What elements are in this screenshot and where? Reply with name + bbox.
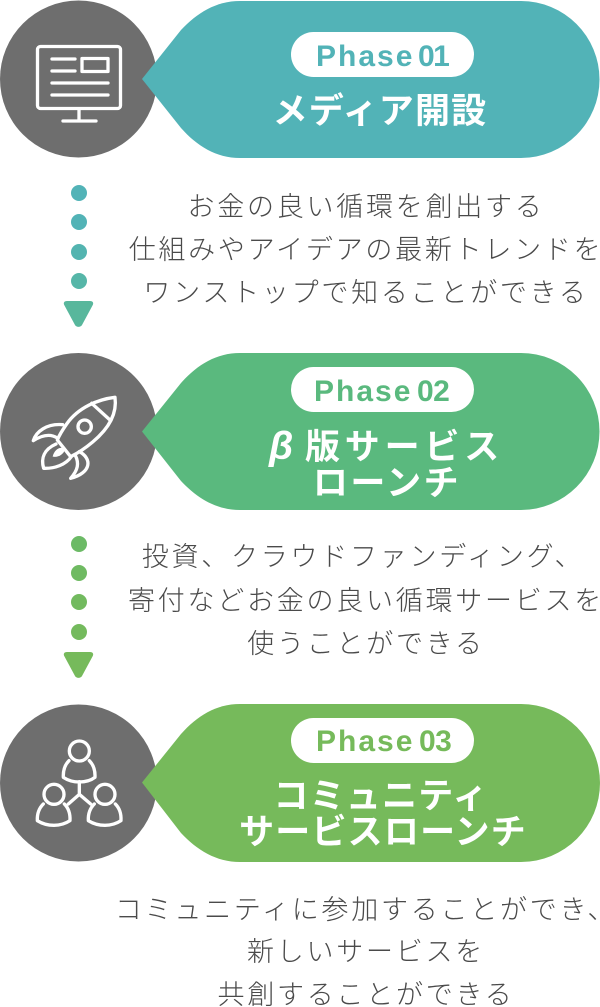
phase 02 pill label: Phase (314, 375, 412, 408)
phase 03 heading (239, 777, 527, 852)
phase 02 pill label: 02 (417, 375, 449, 408)
phase 01 pill label: 01 (418, 40, 449, 73)
text block: phase 02 description: 寄付などお金の良い循環サービスを (128, 586, 600, 616)
panel: phase 03 (142, 704, 600, 862)
text block: phase 03 description (115, 895, 600, 1007)
text block: phase 01 description (129, 192, 600, 308)
phase 03 pill label: Phase (316, 725, 414, 758)
panel: phase 02 (142, 353, 600, 510)
text block: phase 02 description (128, 542, 600, 659)
phase 03 heading: コミュニティ (273, 777, 489, 816)
icon: community (0, 704, 157, 862)
phase 03 pill label: 03 (419, 725, 451, 758)
phase 02 heading: β (268, 425, 293, 468)
text block: phase 03 description: 新しいサービスを (247, 937, 485, 967)
phase 02 heading: 版サービス (305, 428, 504, 467)
arrow: phase 02 to 03 (64, 536, 93, 678)
phase 02 pill label (291, 367, 474, 412)
text block: phase 01 description: 仕組みやアイデアの最新トレンドを (129, 235, 600, 265)
text block: phase 02 description: 使うことができる (247, 629, 485, 659)
phase 02 heading: ローンチ (313, 464, 461, 503)
panel: phase 01 (142, 1, 600, 158)
phase 01 pill label: Phase (316, 40, 414, 73)
text block: phase 02 description: 投資、クラウドファンディング、 (142, 542, 584, 572)
phase 02 banner shape (142, 353, 600, 510)
phase 03 banner shape (142, 704, 600, 862)
phase 02 heading (268, 425, 504, 503)
icon: rocket (0, 353, 157, 510)
text block: phase 01 description: お金の良い循環を創出する (188, 192, 544, 222)
phase 01 heading: メディア開設 (273, 91, 487, 131)
text block: phase 01 description: ワンストップで知ることができる (143, 278, 589, 308)
phase 01 pill label (291, 32, 474, 77)
phase 03 heading: サービスローンチ (239, 813, 527, 852)
arrow: phase 01 to 02 (64, 185, 93, 327)
phase 03 pill label (291, 718, 474, 763)
phase 01 banner shape (142, 1, 600, 158)
icon: monitor (0, 0, 157, 158)
